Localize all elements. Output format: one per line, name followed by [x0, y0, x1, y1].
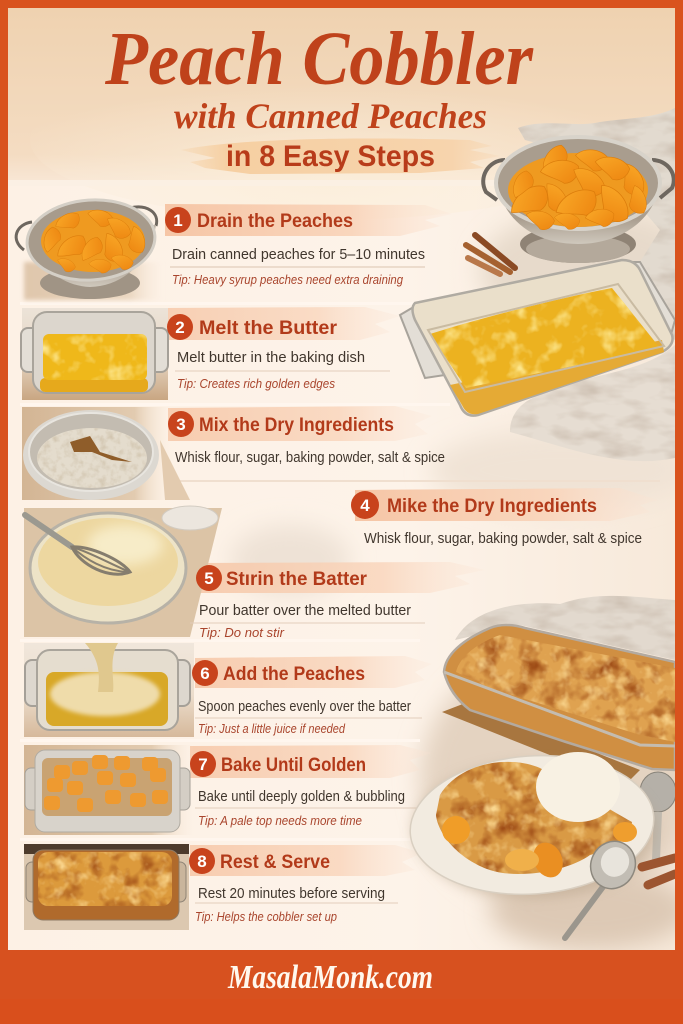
brush stroke 6	[195, 656, 432, 688]
icon: cinnamon sticks top	[466, 235, 515, 274]
step 1 photo: colander	[16, 196, 164, 300]
cloth under butter dish	[510, 345, 675, 461]
tip 8: Tip: Helps the cobbler set up	[195, 910, 337, 924]
heading 5: Stırin the Batter	[226, 569, 368, 590]
tip 6: Tip: Just a little juice if needed	[198, 722, 346, 736]
step 2 photo: melted butter dish	[21, 308, 168, 400]
step 8 photo: baked cobbler	[24, 844, 189, 930]
wooden board	[442, 702, 640, 785]
number 5: 5	[204, 569, 214, 588]
number 1	[165, 207, 191, 233]
number 1: 1	[173, 211, 183, 230]
step 1	[16, 196, 452, 300]
large baked cobbler dish	[444, 625, 675, 770]
brush highlight and tagline	[181, 138, 500, 174]
flour dust and table surface on the right	[230, 210, 683, 950]
second spoon	[640, 772, 676, 860]
heading 2: Melt the Butter	[199, 318, 338, 339]
step 7 photo: peaches in metal pan	[24, 745, 194, 835]
description 6: Spoon peaches evenly over the batter	[198, 699, 411, 715]
number 2	[167, 314, 193, 340]
heading 7: Bake Until Golden	[221, 755, 366, 776]
tip 2: Tip: Creates rich golden edges	[177, 377, 335, 391]
heading 3: Mix the Dry Ingredients	[199, 415, 394, 436]
step 7	[24, 745, 432, 835]
plate of cobbler with ice cream	[405, 748, 659, 938]
heading 8: Rest & Serve	[220, 852, 330, 873]
brush stroke 4	[355, 488, 658, 521]
number 6: 6	[200, 664, 210, 683]
icon: cinnamon sticks bottom	[642, 858, 675, 885]
description 8: Rest 20 minutes before serving	[198, 886, 385, 902]
cobbler serving	[436, 762, 632, 874]
number 3: 3	[176, 415, 186, 434]
footer band with site name: MasalaMonk.com	[227, 959, 433, 996]
number 2: 2	[175, 318, 185, 337]
number 7: 7	[198, 755, 208, 774]
heading 6: Add the Peaches	[223, 664, 365, 685]
step 3	[22, 406, 445, 500]
heading 1: Drain the Peaches	[197, 211, 353, 232]
step 4	[351, 488, 658, 547]
tip 5: Tip: Do not stir	[199, 626, 285, 640]
tip 7: Tip: A pale top needs more time	[198, 814, 362, 828]
tip 1: Tip: Heavy syrup peaches need extra draining	[172, 273, 403, 287]
number 4	[351, 491, 379, 519]
brush stroke 8	[190, 845, 422, 876]
number 4: 4	[360, 496, 370, 515]
step 6	[24, 643, 432, 737]
description 7: Bake until deeply golden & bubbling	[198, 789, 405, 805]
description 3: Whisk flour, sugar, baking powder, salt & spice	[175, 450, 445, 466]
footer band with site name	[0, 950, 683, 1024]
heading 4: Mike the Dry Ingredients	[387, 496, 597, 517]
step 6 photo: batter poured in dish	[24, 643, 194, 737]
step 2	[21, 307, 400, 400]
step 3 photo: dry ingredients bowl	[22, 407, 190, 500]
description 2: Melt butter in the baking dish	[177, 350, 365, 366]
serving spoon	[565, 834, 643, 938]
row dividers	[20, 302, 660, 841]
number 6	[192, 660, 218, 686]
step 8	[24, 844, 422, 930]
title: Peach Cobbler	[104, 17, 534, 101]
brush stroke 2	[165, 307, 400, 340]
brush stroke 3	[168, 406, 432, 441]
number 3	[168, 411, 194, 437]
brush stroke 5	[195, 562, 485, 593]
brush stroke 7	[190, 745, 432, 778]
subtitle: with Canned Peaches	[174, 96, 487, 136]
cloth behind baked dish	[455, 596, 675, 660]
description 5: Pour batter over the melted butter	[199, 603, 411, 619]
step 5 photo: batter and whisk	[24, 506, 222, 637]
glass dish with melted butter	[400, 260, 675, 416]
number 8: 8	[197, 852, 207, 871]
step 5	[24, 506, 485, 640]
description 1: Drain canned peaches for 5–10 minutes	[172, 247, 425, 263]
large colander with peaches	[483, 137, 674, 263]
number 8	[189, 848, 215, 874]
brush stroke 1	[165, 204, 452, 236]
cloth top right	[518, 108, 675, 340]
number 7	[190, 751, 216, 777]
ice cream scoop	[536, 752, 620, 822]
description 4: Whisk flour, sugar, baking powder, salt & spice	[364, 531, 642, 547]
number 5	[196, 565, 222, 591]
brush highlight and tagline: in 8 Easy Steps	[226, 140, 435, 173]
